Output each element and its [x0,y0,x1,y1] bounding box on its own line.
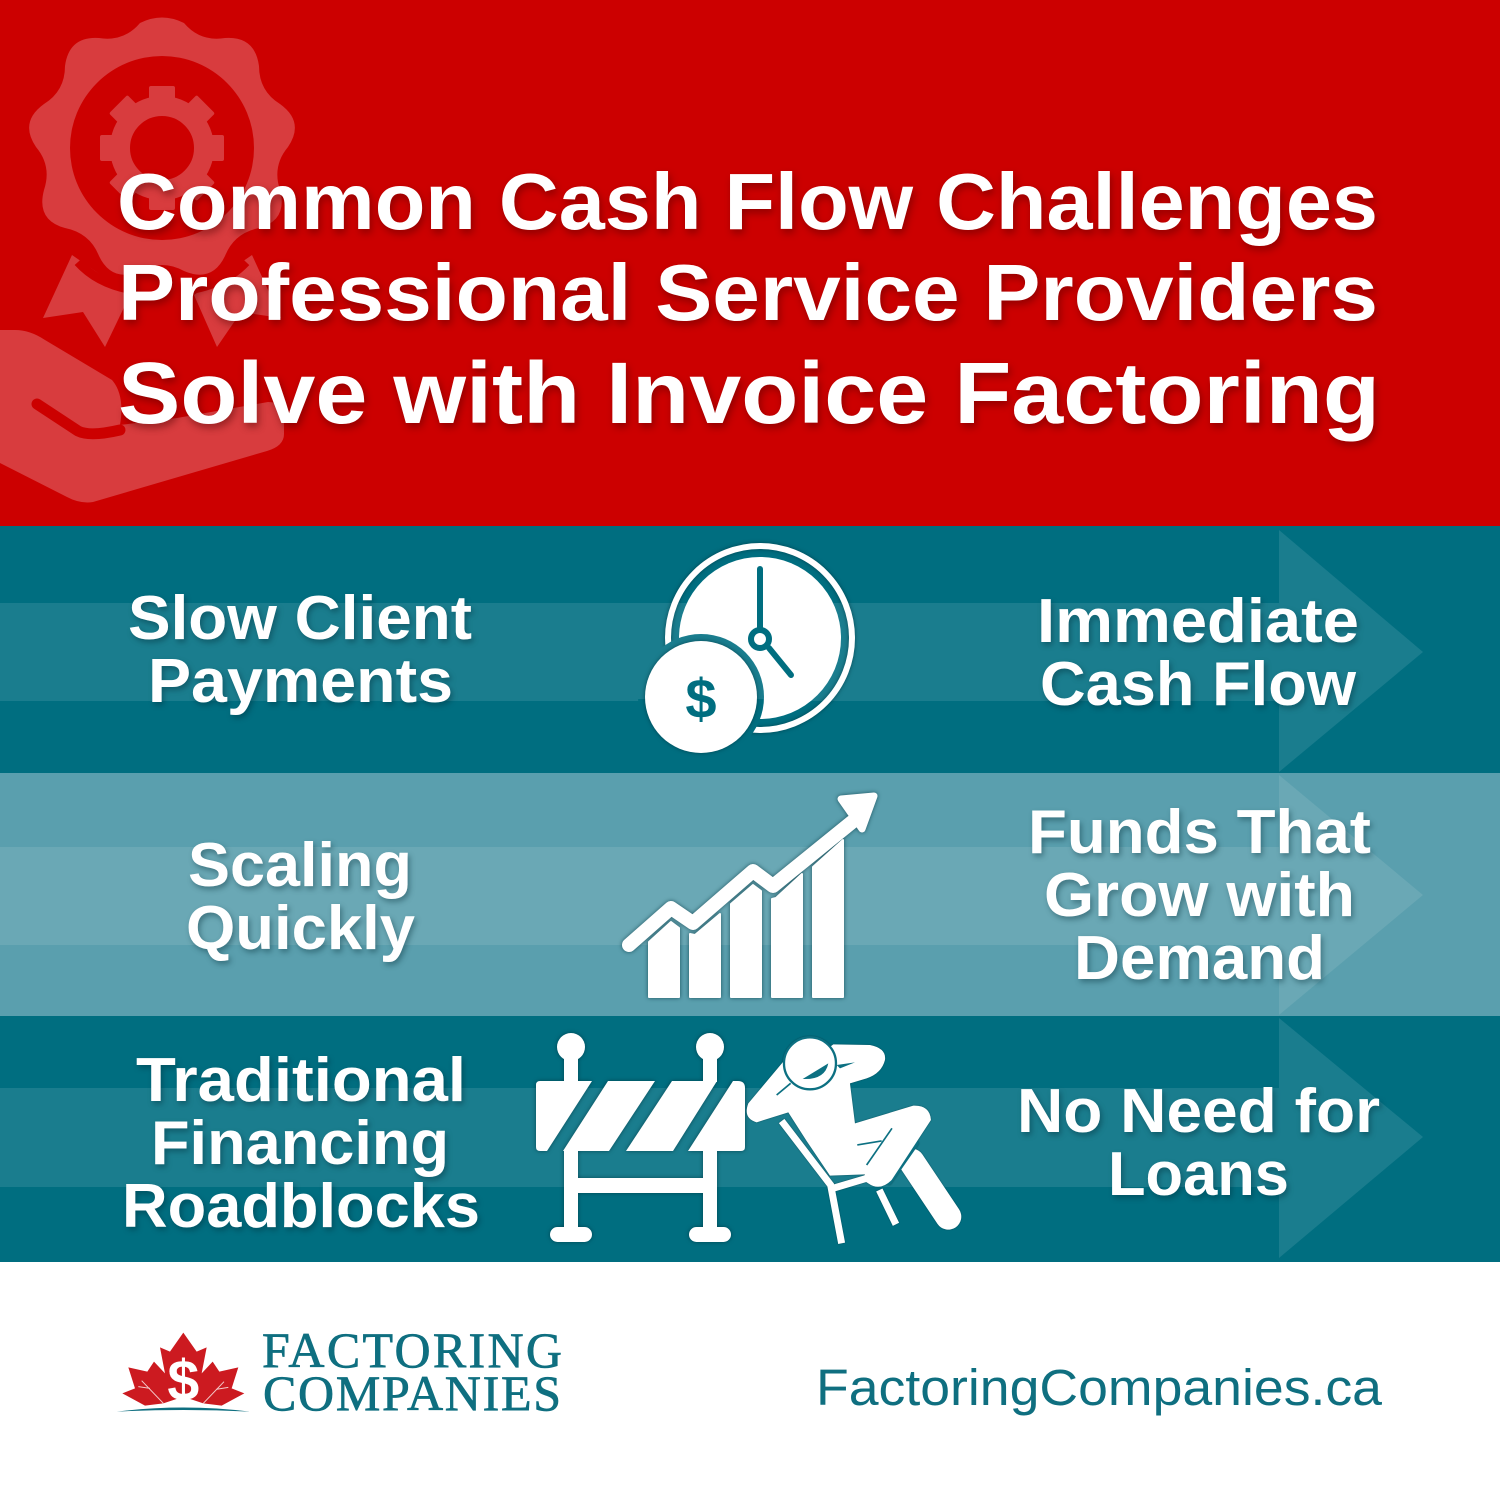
text: Scaling Quickly: Scaling [188,831,412,900]
text: Traditional Financing Roadblocks: Roadblocks [122,1172,480,1241]
logo: Factoring Companies: COMPANIES [263,1365,561,1421]
text: Traditional Financing Roadblocks: Financing [151,1109,449,1178]
text: Immediate Cash Flow [1037,587,1359,719]
logo: Factoring Companies: FACTORING [262,1322,562,1378]
text: No Need for Loans [1017,1077,1380,1209]
panel: red header [0,0,1500,526]
panel: row 2 background arrow [0,773,1500,1016]
icon: road barrier [536,1033,745,1242]
title: Solve with Invoice Factoring [118,345,1380,442]
text: Traditional Financing Roadblocks: Traditional [136,1046,466,1115]
panel: row 3 background arrow [0,1016,1500,1262]
icon: clock and dollar coin [638,546,852,760]
text: Scaling Quickly [186,831,416,963]
text: Scaling Quickly: Quickly [186,894,416,963]
text: Immediate Cash Flow: Immediate [1037,587,1359,656]
icon: maple leaf with dollar sign [117,1333,250,1413]
title [117,157,1380,442]
title: Common Cash Flow Challenges [117,157,1378,246]
text: Funds That Grow with Demand: Demand [1074,924,1325,993]
logo: Factoring Companies [117,1322,562,1421]
icon: maple leaf with dollar sign: $ [167,1349,199,1413]
text: Funds That Grow with Demand: Funds That [1028,798,1371,867]
text: Immediate Cash Flow: Cash Flow [1040,650,1357,719]
text: No Need for Loans: Loans [1108,1140,1289,1209]
icon: growth bar chart with arrow [629,796,874,997]
text: Funds That Grow with Demand: Grow with [1044,861,1355,930]
icon: relaxed person in a reclining chair [747,1037,948,1243]
panel: row 1 background arrow [0,526,1500,773]
text: Slow Client Payments: Slow Client [128,584,472,653]
icon: award ribbon held in hand (background watermark) [0,18,295,502]
text: No Need for Loans: No Need for [1017,1077,1380,1146]
text: Traditional Financing Roadblocks [122,1046,480,1241]
website address: FactoringCompanies.ca [816,1359,1383,1416]
text: Slow Client Payments: Payments [148,647,453,716]
title: Professional Service Providers [118,248,1378,337]
text: Funds That Grow with Demand [1028,798,1371,993]
text: Slow Client Payments [128,584,472,716]
icon: clock and dollar coin: $ [685,667,717,730]
